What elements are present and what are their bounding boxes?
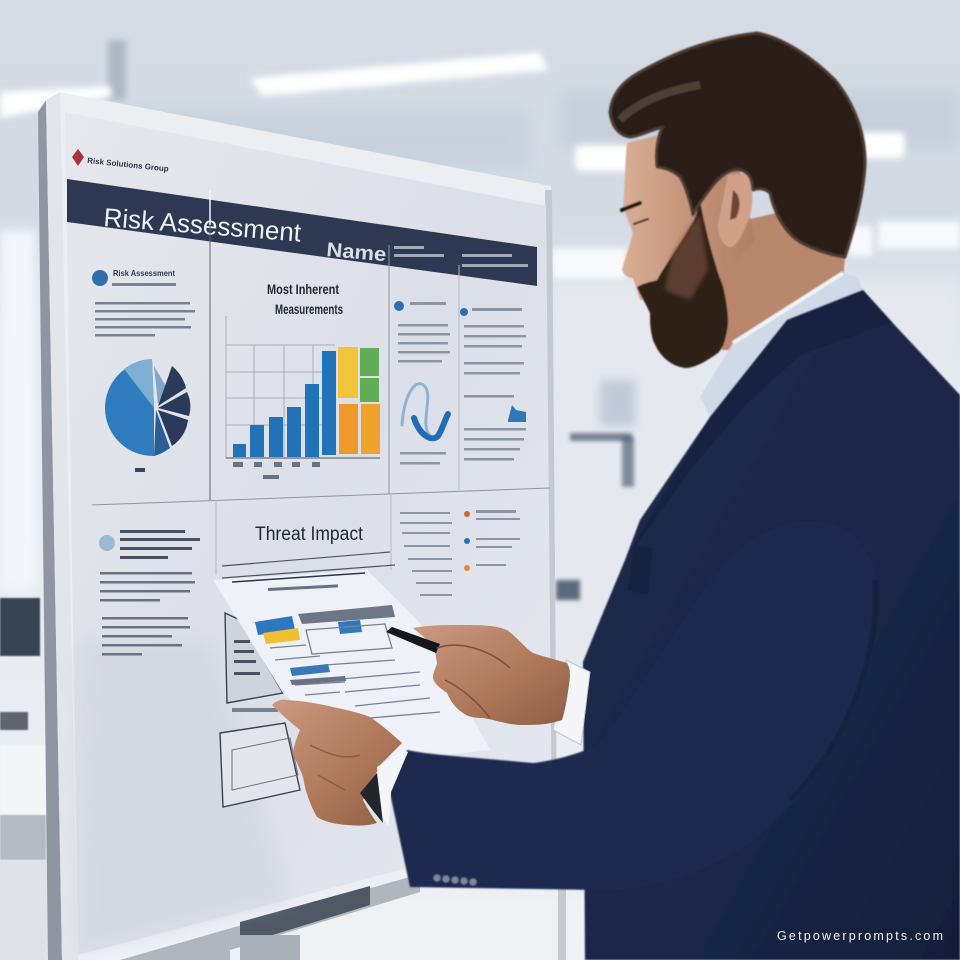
logo and small header: Risk Solutions Group	[87, 156, 169, 174]
ceiling lights	[0, 52, 960, 278]
watch and cuff	[377, 750, 408, 826]
hand: left holding paper	[272, 700, 402, 826]
pen	[386, 627, 440, 653]
panel: bar chart: Most Inherent	[267, 281, 339, 297]
panel: threat impact heading: Threat Impact	[255, 524, 364, 545]
lower boxes on the board	[220, 613, 300, 807]
lapel	[625, 290, 892, 560]
eyebrow	[622, 203, 640, 210]
watermark: Getpowerprompts.com	[777, 929, 943, 943]
sleeve	[390, 521, 876, 890]
header band with title	[67, 179, 537, 286]
man: head	[610, 33, 865, 368]
logo and small header	[72, 149, 169, 174]
whiteboard surface	[65, 112, 552, 955]
panel: right column upper	[394, 301, 526, 464]
beard	[637, 200, 728, 368]
panel: lower right list	[400, 510, 520, 596]
panel: pie chart: Risk Assessment	[113, 268, 175, 278]
man: suit jacket	[390, 290, 960, 960]
stacked blocks	[338, 347, 380, 454]
hand: right with pen	[413, 625, 570, 725]
board shading	[78, 640, 290, 950]
bars	[233, 351, 336, 457]
man: neck and collar	[700, 210, 863, 417]
panel: lower left text	[99, 530, 200, 656]
whiteboard frame and stand	[38, 92, 557, 960]
panel: bar chart: Measurements	[275, 301, 343, 317]
hair	[610, 33, 865, 257]
panel: bar chart	[226, 281, 380, 479]
line chart	[402, 384, 448, 438]
header band with title: Name	[326, 239, 387, 266]
panel: threat impact heading	[222, 524, 395, 578]
panel: pie chart	[92, 268, 195, 472]
ear	[718, 173, 752, 247]
panel grid lines	[92, 190, 550, 575]
man: shirt cuffs and hands	[272, 625, 590, 826]
pie chart	[105, 359, 190, 456]
face	[622, 130, 755, 300]
header band with title: Risk Assessment	[103, 202, 303, 248]
held paper document	[213, 570, 490, 760]
jacket cuff buttons	[434, 874, 476, 886]
